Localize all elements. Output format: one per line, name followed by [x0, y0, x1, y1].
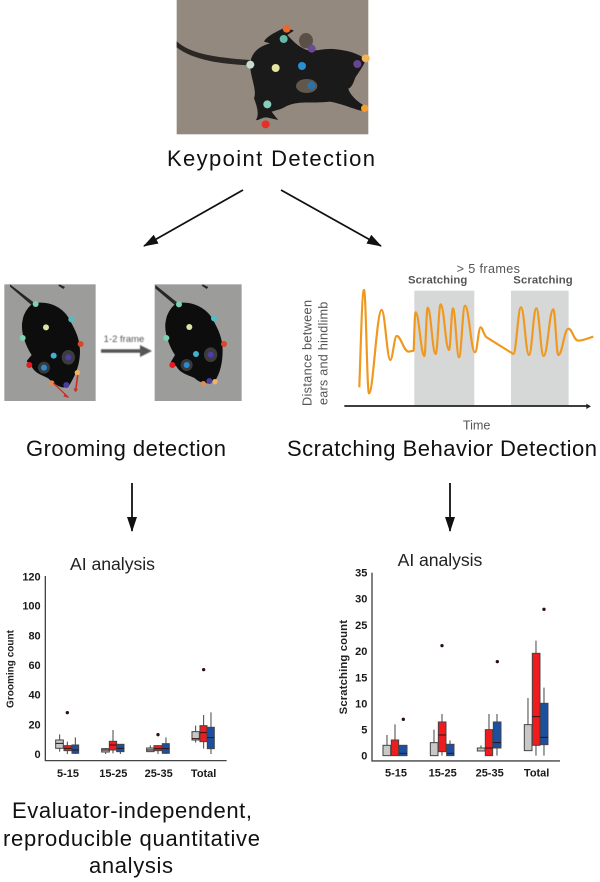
y tick labels: 25	[355, 620, 367, 632]
time axis	[344, 403, 588, 408]
conclusion text: analysis	[89, 853, 173, 878]
heading: keypoint detection: Keypoint Detection	[167, 146, 375, 171]
y tick labels: 100	[22, 601, 41, 613]
y tick labels: 0	[35, 749, 41, 761]
boxes	[383, 608, 548, 756]
y axis label	[301, 300, 331, 406]
y tick labels: 40	[28, 690, 41, 702]
x tick labels: 15-25	[429, 768, 457, 780]
arrow: to grooming detection	[144, 190, 243, 246]
heading: grooming detection: Grooming detection	[26, 436, 226, 461]
y tick labels: 0	[361, 751, 367, 763]
x tick labels: 5-15	[57, 768, 79, 780]
y tick labels: 10	[355, 698, 367, 710]
y tick labels: 5	[361, 725, 367, 737]
keypoint dots on mouse	[246, 25, 370, 128]
y axis title: Scratching count	[338, 620, 350, 714]
grooming frame before	[4, 284, 96, 401]
mouse photo with keypoints	[177, 0, 370, 134]
x tick labels: 25-35	[476, 768, 504, 780]
frame interval arrow and label	[101, 334, 152, 357]
scratching label 2: Scratching	[513, 274, 573, 286]
y tick labels	[355, 568, 367, 763]
box plot: grooming count	[5, 554, 227, 780]
x tick labels: 15-25	[99, 768, 127, 780]
axes	[45, 576, 227, 761]
x tick labels: 25-35	[145, 768, 173, 780]
boxes	[56, 668, 214, 754]
x tick labels: 5-15	[385, 768, 407, 780]
y tick labels: 30	[355, 594, 367, 606]
arrow: to scratching detection	[281, 190, 381, 246]
y axis label: ears and hindlimb	[317, 302, 331, 405]
x tick labels	[57, 768, 216, 780]
y tick labels: 20	[28, 719, 41, 731]
frames label: > 5 frames	[457, 262, 520, 276]
y tick labels: 15	[355, 672, 367, 684]
box plot: scratching count	[338, 550, 560, 780]
x tick labels: Total	[191, 768, 216, 780]
y tick labels: 20	[355, 646, 367, 658]
y tick labels: 60	[28, 660, 41, 672]
x tick labels: Total	[524, 768, 549, 780]
y tick labels: 120	[22, 571, 41, 583]
arrow: to scratching chart	[449, 483, 451, 531]
y tick labels: 35	[355, 568, 367, 580]
y tick labels: 80	[28, 630, 41, 642]
y tick labels	[22, 571, 41, 761]
x axis label: Time	[463, 418, 490, 432]
heading: scratching behavior detection: Scratching Behavior Detection	[287, 436, 597, 461]
chart title: AI analysis	[398, 550, 482, 570]
line chart: scratching distance over time	[301, 262, 593, 432]
x tick labels	[385, 768, 549, 780]
conclusion text	[3, 798, 260, 878]
y axis label: Distance between	[301, 300, 315, 406]
y axis title: Grooming count	[5, 629, 16, 708]
chart title: AI analysis	[70, 554, 155, 574]
scratching label 1: Scratching	[408, 274, 467, 286]
axes	[372, 573, 560, 761]
grooming frame after	[155, 284, 242, 401]
frame interval arrow and label: 1-2 frame	[104, 334, 144, 345]
conclusion text: Evaluator-independent,	[12, 798, 252, 823]
arrow: to grooming chart	[131, 483, 133, 531]
distance curve	[359, 290, 593, 393]
conclusion text: reproducible quantitative	[3, 826, 260, 851]
scratching window 2	[511, 291, 569, 406]
scratching window 1	[414, 291, 474, 406]
